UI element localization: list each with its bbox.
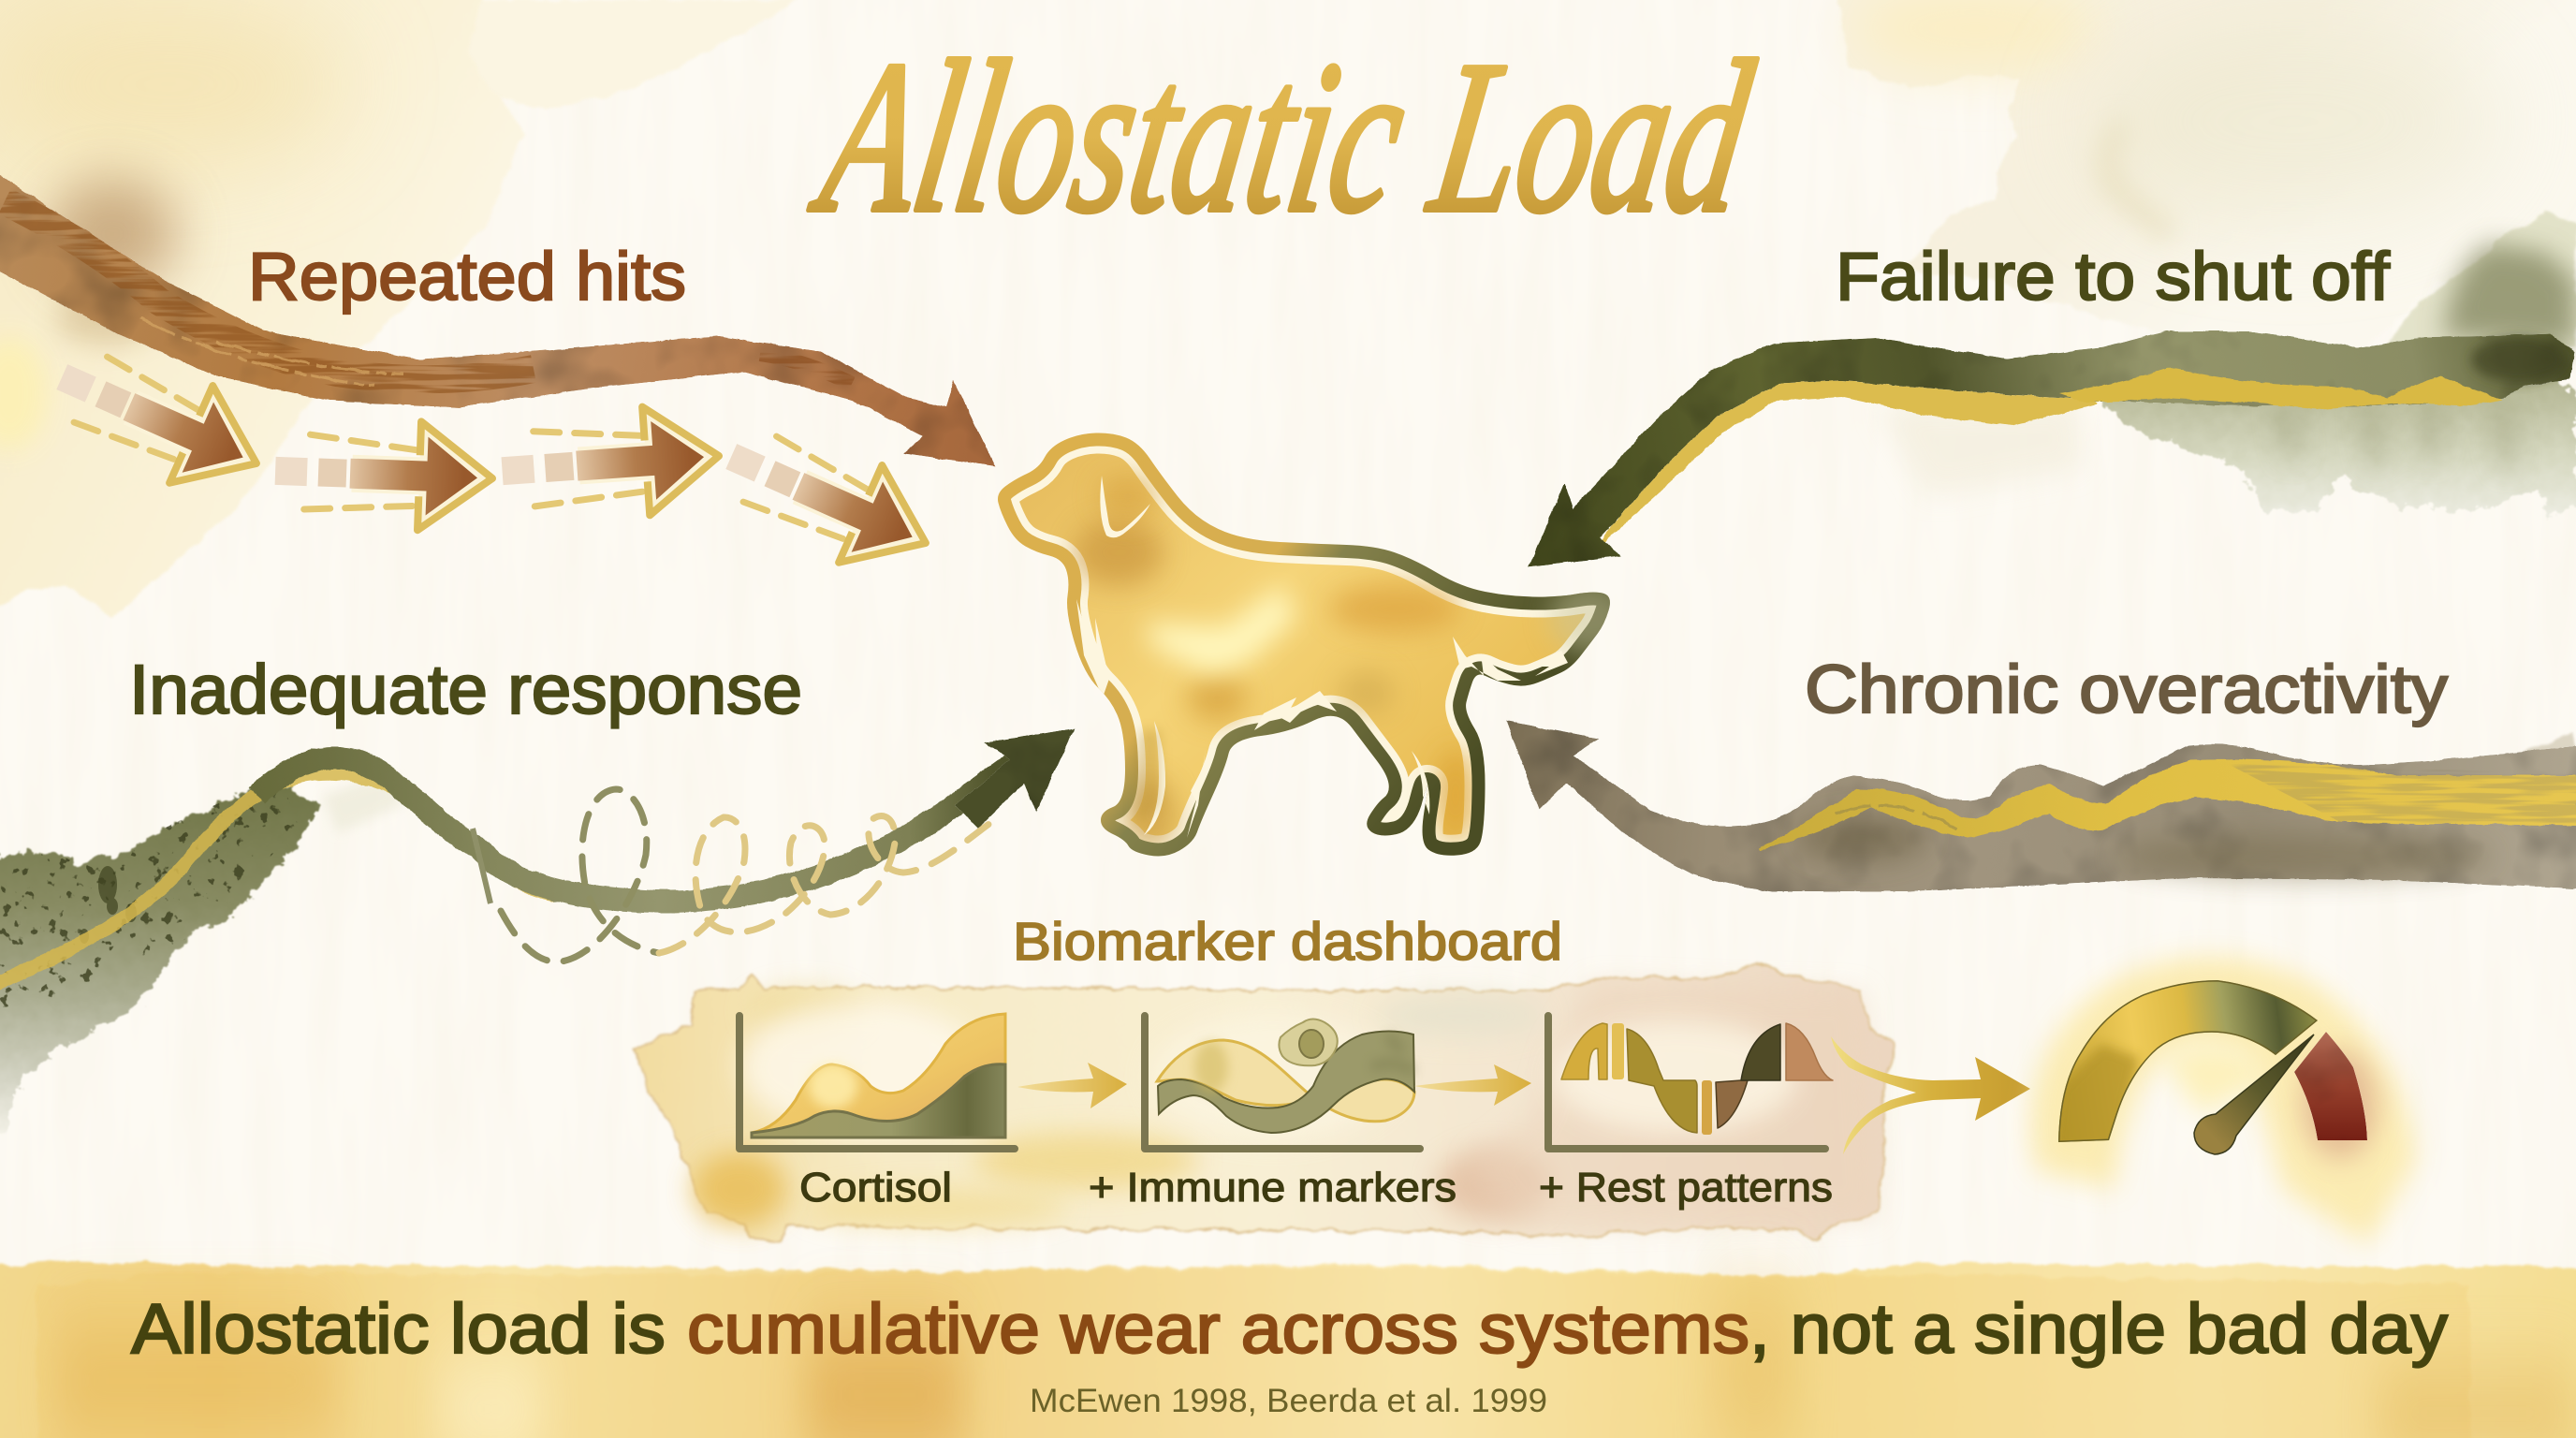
label: rest patterns: + Rest patterns xyxy=(1539,1165,1833,1211)
takeaway sentence: cumulative wear across systems xyxy=(687,1289,1749,1368)
dog watercolor mottling xyxy=(1074,474,1476,852)
dashed curl trail xyxy=(501,789,999,961)
arrow: inadequate response xyxy=(0,728,1075,1133)
title: Allostatic Load xyxy=(800,17,1764,257)
heading: inadequate response: Inadequate response xyxy=(129,651,802,728)
repeated hit arrow 3 xyxy=(499,402,723,525)
bottom band xyxy=(0,1262,2576,1438)
takeaway sentence: , not a single bad day xyxy=(1749,1289,2449,1368)
dog silhouette xyxy=(998,433,1633,857)
arrow: immune markers to rest patterns xyxy=(1414,1064,1531,1106)
chart: cortisol xyxy=(739,1014,1015,1149)
repeated hit arrow 4 xyxy=(710,408,947,592)
heading: repeated hits: Repeated hits xyxy=(248,240,686,315)
label: cortisol: Cortisol xyxy=(799,1165,952,1211)
heading: failure to shut off: Failure to shut off xyxy=(1836,240,2391,315)
heading: biomarker dashboard: Biomarker dashboard xyxy=(1013,912,1562,972)
panel: biomarker dashboard xyxy=(636,961,1894,1241)
gauge needle xyxy=(2194,1034,2314,1154)
takeaway sentence xyxy=(131,1289,2449,1368)
gauge arc: safe to strained xyxy=(2058,980,2318,1142)
takeaway sentence: Allostatic load is xyxy=(131,1289,666,1368)
top-left watercolor wash xyxy=(0,0,798,618)
gauge xyxy=(2031,957,2415,1245)
arrow: chronic overactivity xyxy=(1506,721,2576,891)
chart: immune markers xyxy=(1145,1016,1420,1149)
immune marker cell icon xyxy=(1279,1019,1338,1065)
label: immune markers: + Immune markers xyxy=(1089,1165,1456,1211)
chart: rest patterns xyxy=(1548,1016,1833,1149)
dog fur and ear highlights xyxy=(1076,476,1568,838)
gauge glow xyxy=(2031,957,2415,1245)
repeated hit arrow 2 xyxy=(273,417,494,533)
arrow: repeated hits xyxy=(0,169,995,466)
arrow: cortisol to immune markers xyxy=(1017,1063,1127,1108)
top-right watercolor wash xyxy=(1835,0,2576,374)
citation: McEwen 1998, Beerda et al. 1999 xyxy=(1030,1383,1547,1419)
arrow: merge to gauge xyxy=(1831,1036,2030,1154)
gauge arc: overload xyxy=(2294,1032,2367,1140)
arrow: failure to shut off xyxy=(1529,211,2576,567)
repeated hit arrow 1 xyxy=(40,329,278,512)
heading: chronic overactivity: Chronic overactivity xyxy=(1805,653,2448,727)
